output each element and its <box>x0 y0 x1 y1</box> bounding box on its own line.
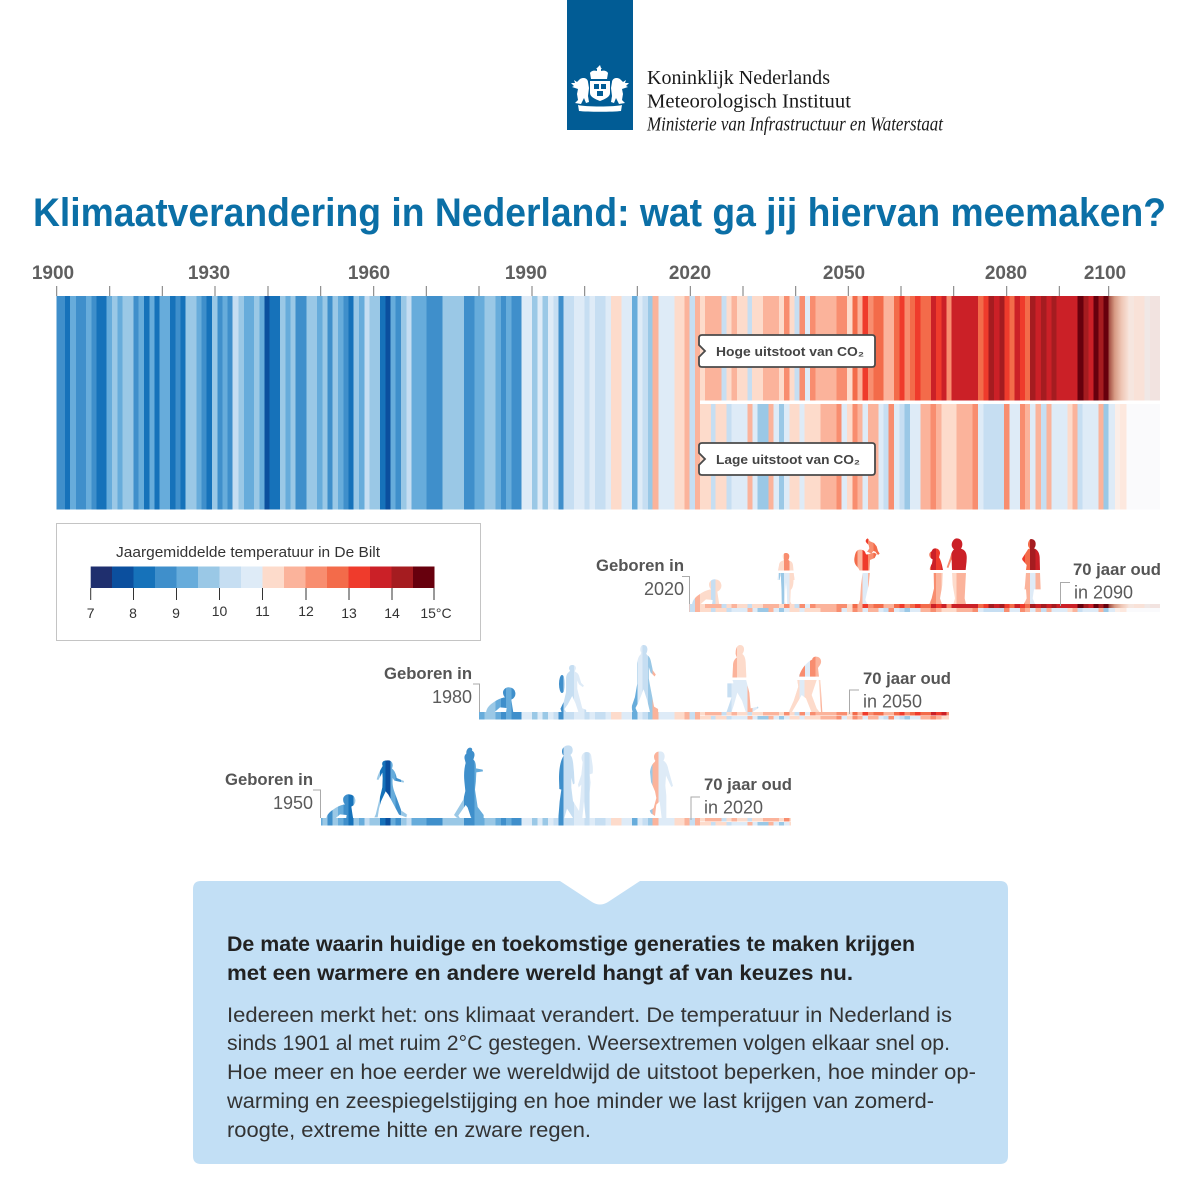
legend scale labels: 12 <box>298 603 314 619</box>
year axis labels: 1960 <box>348 263 390 284</box>
timeline strip 2020 <box>689 604 1160 612</box>
year axis labels: 1990 <box>505 263 547 284</box>
label: 70 years old in 2050: in 2050 <box>863 692 922 712</box>
legend scale labels: 13 <box>341 605 357 621</box>
label: born in 1980: Geboren in <box>384 664 472 683</box>
icon: royal coat of arms <box>571 65 629 112</box>
year axis labels: 2020 <box>669 263 711 284</box>
timeline strip 1950 <box>321 818 791 826</box>
figures: life stages 1980-2050 <box>486 645 822 712</box>
label: 70 years old in 2020: in 2020 <box>704 798 763 818</box>
callout body text: sinds 1901 al met ruim 2°C gestegen. Weersextremen volgen elkaar snel op. <box>227 1032 950 1055</box>
label: born in 2020 <box>596 556 684 599</box>
callout body text: warming en zeespiegelstijging en hoe minder we last krijgen van zomerd- <box>226 1090 934 1113</box>
year axis labels: 1930 <box>188 263 230 284</box>
callout heading: De mate waarin huidige en toekomstige generaties te maken krijgen <box>227 933 915 956</box>
figures: life stages 2020-2090 <box>692 538 1041 604</box>
callout body text: Hoe meer en hoe eerder we wereldwijd de uitstoot beperken, hoe minder op- <box>227 1061 976 1084</box>
row: born in 1980 <box>384 645 950 720</box>
label: 70 years old in 2090 <box>1073 560 1161 602</box>
year axis labels: 1900 <box>32 263 74 284</box>
year axis labels: 2100 <box>1084 263 1126 284</box>
label: born in 1980 <box>384 664 472 707</box>
chart: warming stripes 1900-2110 with high and low emission scenarios <box>57 296 1160 509</box>
year axis labels <box>32 263 1126 284</box>
label: born in 2020: 2020 <box>644 579 684 599</box>
label: low emissions: Lage uitstoot van CO₂ <box>716 452 860 467</box>
organisation name: Meteorologisch Instituut <box>647 90 851 112</box>
callout panel <box>193 881 1008 1164</box>
label: 70 years old in 2090: in 2090 <box>1074 582 1133 602</box>
timeline strip 1980 <box>479 712 949 720</box>
legend scale labels: 9 <box>172 605 180 621</box>
legend colour ramp <box>91 566 434 588</box>
year axis ticks <box>57 286 1109 296</box>
label: 70 years old in 2050: 70 jaar oud <box>863 669 951 688</box>
callout heading <box>227 933 915 985</box>
label: born in 1950: 1950 <box>273 793 313 813</box>
logo: KNMI blue ribbon with crest <box>567 0 633 130</box>
legend: annual mean temperature in De Bilt <box>56 524 480 640</box>
organisation name: Ministerie van Infrastructuur en Waterstaat <box>646 114 943 136</box>
year axis labels: 2050 <box>823 263 865 284</box>
legend scale labels: 14 <box>384 605 400 621</box>
label: 70 years old in 2020: 70 jaar oud <box>704 775 792 794</box>
label: high emissions <box>699 335 875 367</box>
figures: life stages 1950-2020 <box>326 745 673 818</box>
callout heading: met een warmere en andere wereld hangt af van keuzes nu. <box>227 962 853 985</box>
label: born in 1980: 1980 <box>432 687 472 707</box>
label: 70 years old in 2090: 70 jaar oud <box>1073 560 1161 579</box>
legend: annual mean temperature in De Bilt: Jaargemiddelde temperatuur in De Bilt <box>116 545 380 561</box>
callout body text: Iedereen merkt het: ons klimaat verandert. De temperatuur in Nederland is <box>227 1004 952 1027</box>
legend scale labels: 7 <box>87 605 95 621</box>
legend scale labels: 11 <box>255 603 270 619</box>
label: born in 2020: Geboren in <box>596 556 684 575</box>
callout body text <box>226 1004 976 1142</box>
legend scale labels: 8 <box>129 605 137 621</box>
callout body text: roogte, extreme hitte en zware regen. <box>227 1119 591 1142</box>
label: 70 years old in 2020 <box>704 775 792 818</box>
label: low emissions <box>699 443 875 475</box>
label: high emissions: Hoge uitstoot van CO₂ <box>716 344 864 359</box>
legend scale labels: 10 <box>212 603 227 619</box>
label: 70 years old in 2050 <box>863 669 951 712</box>
organisation name <box>646 67 943 136</box>
label: born in 1950 <box>225 770 313 813</box>
row: born in 1950 <box>226 745 791 826</box>
label: born in 1950: Geboren in <box>225 770 313 789</box>
row: born in 2020 <box>596 538 1160 612</box>
legend scale labels: 15°C <box>420 605 452 621</box>
legend scale labels <box>87 603 452 621</box>
year axis labels: 2080 <box>985 263 1027 284</box>
organisation name: Koninklijk Nederlands <box>647 67 830 89</box>
